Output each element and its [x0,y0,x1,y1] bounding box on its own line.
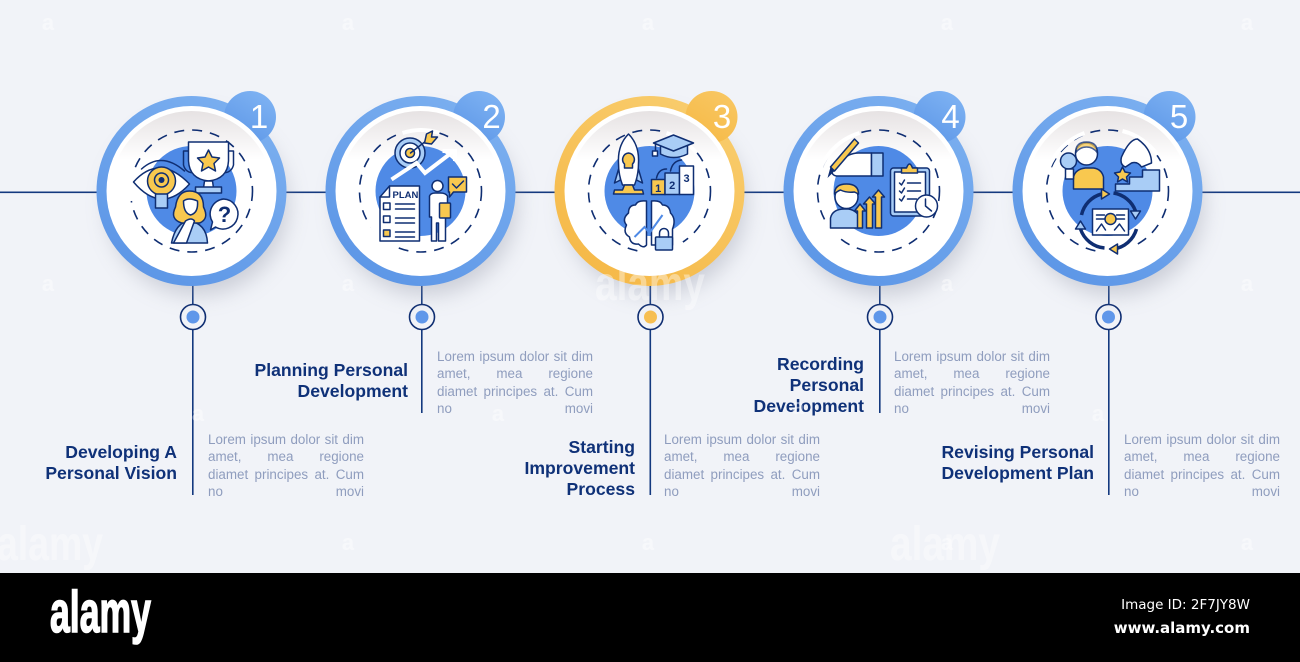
footer logo: alamy [50,580,151,645]
watermark: small letter marks: a [941,271,954,296]
number badge 1: 1 [250,98,268,135]
icon: thinking girl [172,191,208,243]
text block: step 2 [437,349,593,416]
heading: Starting Improvement Process [525,437,635,499]
step 5 connector and node [1096,280,1121,495]
icon: rocket with bulb [614,134,644,194]
heading: Recording Personal Development: Development [754,396,864,416]
icon: cycle with idea board [1076,189,1140,254]
watermark: small letter marks: a [1092,401,1105,426]
watermark: small letter marks: a [1241,530,1254,555]
text block: step 5: diamet principes at. Cum [1124,467,1280,482]
number badge 4 [914,91,966,143]
watermark: small letter marks: a [42,10,55,35]
icon: man [830,184,860,228]
panel: step 2 circle [326,91,516,295]
horizontal timeline [0,192,1300,193]
icon: brain with chart and lock [624,201,674,250]
watermark: small letter marks [42,10,1254,555]
heading: Starting Improvement Process: Starting [569,437,635,457]
icon: growth bars [854,190,884,228]
icon: hand placing star on stairs [1114,139,1160,191]
text block: step 1: Lorem ipsum dolor sit dim [208,432,364,447]
icon: trophy [184,142,234,193]
text block: step 5 [1124,432,1280,499]
icon: podium [652,160,694,195]
icon: eye with gear bulb [134,160,190,208]
icon: podium: 3 [683,173,690,185]
heading: Recording Personal Development [754,354,864,416]
text block: step 2: Lorem ipsum dolor sit dim [437,349,593,364]
heading: Recording Personal Development: Recording [777,354,864,374]
icon: man with magnifier [1060,142,1104,189]
heading: Planning Personal Development [254,360,408,401]
text block: step 5: Lorem ipsum dolor sit dim [1124,432,1280,447]
number badge 4: 4 [941,98,960,135]
text block: step 3: amet, mea regione [664,449,820,464]
icon: check bubble [448,177,466,197]
step 2 connector and node [410,280,434,413]
heading: Revising Personal Development Plan: Development Plan [941,463,1094,483]
panel: step 4 circle [784,91,974,295]
icon: rising arrow [392,151,455,180]
panel: step 3 circle [554,91,746,295]
text block: step 5: no movi [1124,484,1280,499]
watermark: small letter marks: a [342,530,355,555]
heading: Planning Personal Development: Planning Personal [254,360,408,380]
step 1 connector and node [180,280,206,495]
number badge 3: 3 [713,98,731,135]
watermark: small letter marks: a [792,394,805,419]
text block: step 1: no movi [208,484,364,499]
heading: Starting Improvement Process: Improvement [525,458,635,478]
step 3 connector and node [638,280,663,495]
heading: Revising Personal Development Plan [941,442,1094,483]
icon: hand writing with pen [828,139,883,178]
number badge 5: 5 [1170,98,1188,135]
heading: Planning Personal Development: Development [298,381,408,401]
step 4 connector and node [868,280,892,413]
watermark: large alamy marks [0,258,1000,571]
text block: step 2: diamet principes at. Cum [437,384,593,399]
footer website: www.alamy.com [1114,619,1250,637]
text block: step 4: amet, mea regione [894,366,1050,381]
watermark: small letter marks: a [941,530,954,555]
icon: clipboard with clock [890,164,938,217]
watermark: large alamy marks: alamy [890,518,1000,571]
icon: plan document: PLAN [392,190,418,201]
icon: person with clipboard [430,180,450,241]
text block: step 3 [664,432,820,499]
text block: step 2: no movi [437,401,593,416]
watermark: small letter marks: a [42,271,55,296]
heading: Developing A Personal Vision: Personal Vision [45,463,177,483]
heading: Recording Personal Development: Personal [790,375,864,395]
number badge 5 [1144,91,1196,143]
icon: graduation cap [652,135,694,158]
watermark: small letter marks: a [1241,10,1254,35]
number badge 2: 2 [482,98,501,135]
heading: Developing A Personal Vision: Developing A [65,442,177,462]
watermark: large alamy marks: alamy [595,258,705,311]
watermark: small letter marks: a [342,271,355,296]
icon: target with arrow [395,131,438,168]
icon: podium: 2 [669,180,675,192]
watermark: small letter marks: a [642,10,655,35]
icon: question bubble: ? [218,202,231,227]
icon: question bubble [210,199,238,230]
panel: step 5 circle [1012,91,1204,295]
text block: step 1: amet, mea regione [208,449,364,464]
text block: step 4: Lorem ipsum dolor sit dim [894,349,1050,364]
heading: Revising Personal Development Plan: Revising Personal [941,442,1094,462]
text block: step 1 [208,432,364,499]
watermark: small letter marks: a [342,10,355,35]
text block: step 5: amet, mea regione [1124,449,1280,464]
text block: step 1: diamet principes at. Cum [208,467,364,482]
text block: step 4: diamet principes at. Cum [894,384,1050,399]
number badge 3 [686,91,738,143]
watermark: small letter marks: a [1241,271,1254,296]
watermark: large alamy marks: alamy [0,518,103,571]
text block: step 3: Lorem ipsum dolor sit dim [664,432,820,447]
number badge 2 [453,91,505,143]
watermark: small letter marks: a [492,401,505,426]
watermark: small letter marks: a [192,401,205,426]
number badge 1 [224,91,276,143]
footer image id: Image ID: 2F7JY8W [1121,597,1250,613]
watermark: small letter marks: a [941,10,954,35]
panel: step 1 circle [96,91,288,295]
text block: step 4 [894,349,1050,416]
text block: step 4: no movi [894,401,1050,416]
heading: Developing A Personal Vision [45,442,177,483]
text block: step 2: amet, mea regione [437,366,593,381]
icon: plan document [380,186,420,241]
text block: step 3: diamet principes at. Cum [664,467,820,482]
watermark: small letter marks: a [642,530,655,555]
footer band [0,573,1300,662]
text block: step 3: no movi [664,484,820,499]
icon: podium: 1 [655,183,661,195]
heading: Starting Improvement Process: Process [567,479,635,499]
